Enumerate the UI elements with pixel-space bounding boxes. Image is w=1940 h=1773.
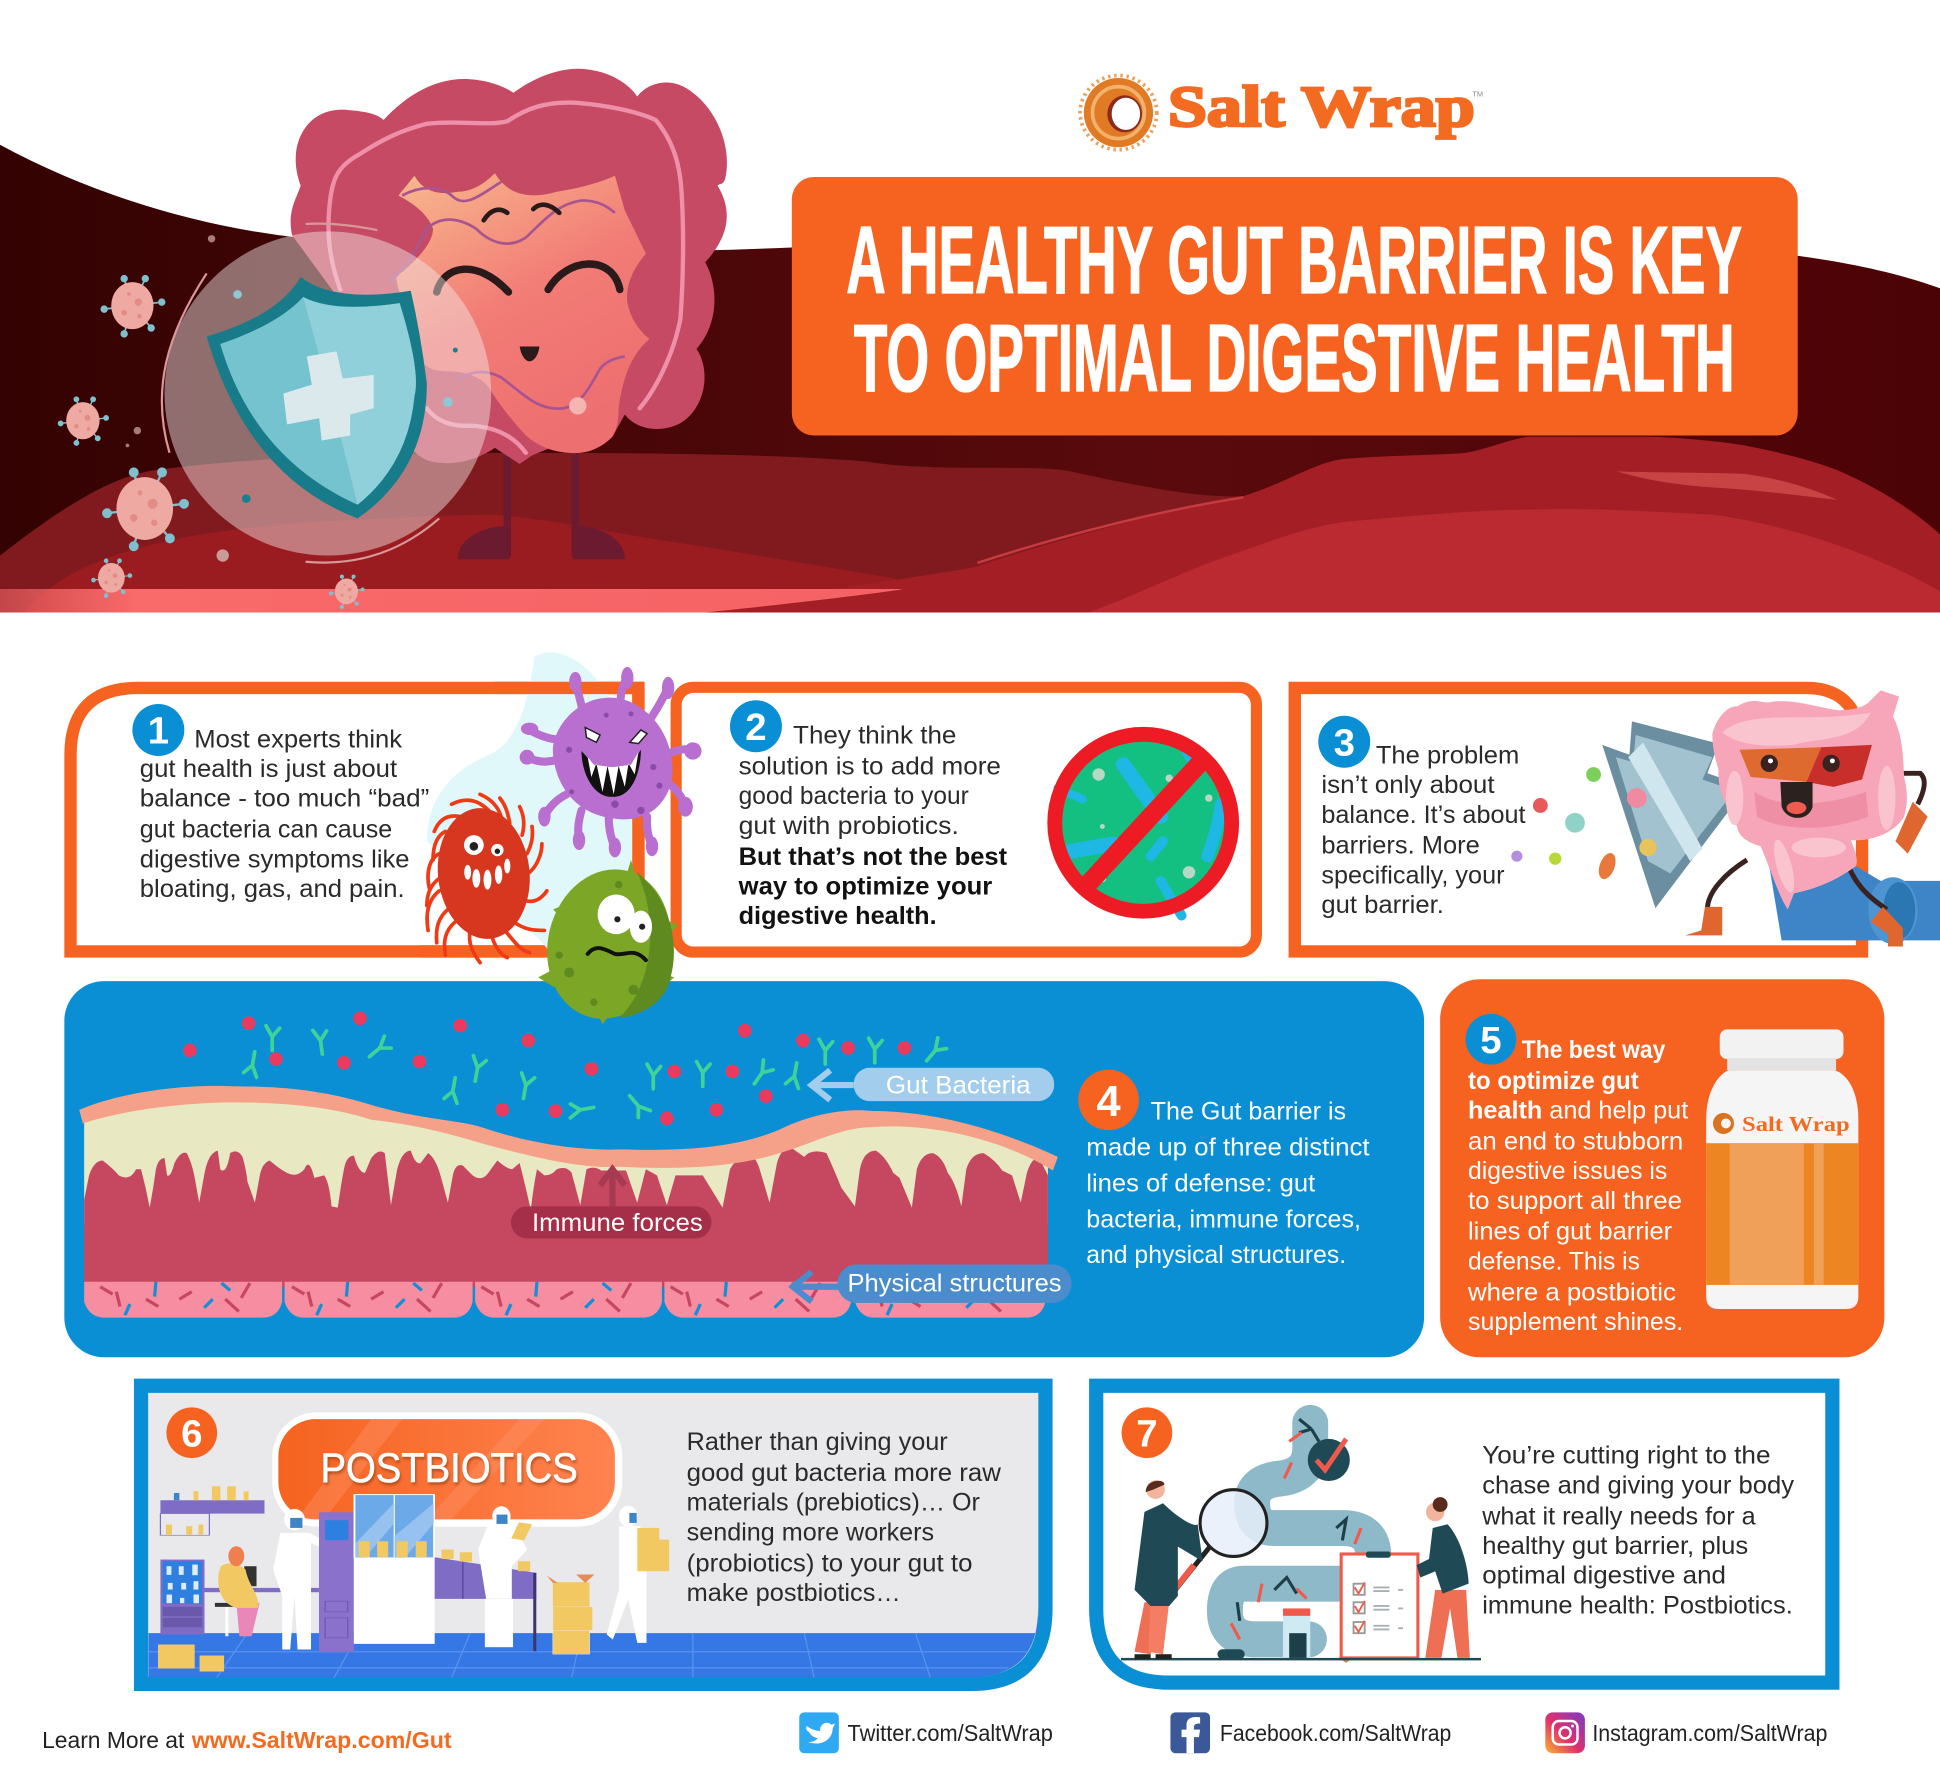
number 6 — [166, 1407, 217, 1458]
text 3: The problem — [1376, 741, 1519, 769]
text 3: isn’t only about — [1321, 771, 1495, 799]
bacteria dots — [183, 1011, 911, 1125]
gut tissue layers — [79, 1086, 1058, 1318]
POSTBIOTICS sign: POSTBIOTICS — [320, 1444, 578, 1491]
mask — [1740, 747, 1821, 782]
orange top edge over blob — [495, 683, 643, 693]
text 4: made up of three distinct — [1086, 1134, 1370, 1162]
text 5: lines of gut barrier — [1468, 1218, 1673, 1246]
twitter — [799, 1712, 1053, 1753]
number 4 — [1078, 1070, 1139, 1130]
intestine hero — [1685, 690, 1928, 947]
face — [396, 173, 650, 453]
text 2 — [738, 722, 1008, 930]
conveyor — [435, 1550, 536, 1651]
gut tube illustration — [1121, 1419, 1481, 1663]
instagram: Instagram.com/SaltWrap — [1592, 1720, 1827, 1746]
man with magnifier — [1135, 1480, 1203, 1659]
text 6: Rather than giving your — [687, 1428, 948, 1456]
text 4 — [1086, 1098, 1370, 1269]
motion arcs — [162, 224, 439, 563]
bottle label logo: Salt Wrap — [1742, 1112, 1850, 1136]
text 5: supplement shines. — [1468, 1308, 1683, 1336]
legs and feet — [458, 445, 625, 559]
panel 4: gut barrier diagram — [64, 981, 1424, 1357]
text 7: immune health: Postbiotics. — [1482, 1591, 1793, 1619]
shield cross — [283, 351, 374, 440]
arrow and label: gut bacteria: Gut Bacteria — [886, 1072, 1032, 1100]
number 1 — [132, 704, 184, 756]
text 7: chase and giving your body — [1482, 1471, 1794, 1499]
text 5: to optimize gut — [1468, 1067, 1639, 1095]
hero banner background — [0, 145, 1940, 612]
woman with clipboard — [1417, 1497, 1470, 1658]
panel 2: probiotics — [676, 687, 1256, 952]
shelves — [160, 1486, 264, 1535]
checklist clipboard — [1341, 1552, 1418, 1658]
text 5: an end to stubborn — [1468, 1127, 1683, 1155]
lab floor — [148, 1608, 1038, 1677]
purple bacterium — [520, 667, 702, 857]
text 5: to support all three — [1468, 1187, 1682, 1215]
bacteria characters and cyan blob — [421, 652, 702, 1032]
POSTBIOTICS sign — [272, 1412, 622, 1527]
number 3: 3 — [1334, 721, 1355, 764]
logo: Salt Wrap: Salt Wrap — [1168, 74, 1475, 139]
text 4: and physical structures. — [1086, 1241, 1346, 1269]
text 5: health and help put — [1468, 1096, 1688, 1124]
antibodies — [243, 1026, 948, 1119]
text 5: where a postbiotic — [1467, 1278, 1676, 1306]
text 4: lines of defense: gut — [1086, 1169, 1315, 1197]
shield of character — [1602, 721, 1747, 908]
number 1: 1 — [148, 710, 169, 753]
text 1: digestive symptoms like — [140, 845, 410, 873]
text 1: balance - too much “bad” — [140, 785, 429, 813]
panel 7: cutting to the chase — [1096, 1386, 1832, 1683]
cyan blob — [427, 652, 633, 953]
text 7: optimal digestive and — [1482, 1562, 1726, 1590]
text 3: specifically, your — [1321, 861, 1505, 889]
check badge — [1308, 1439, 1350, 1481]
text 2: way to optimize your — [738, 873, 992, 901]
panel 1 orange edge over blob — [421, 688, 638, 951]
seated scientist — [203, 1546, 325, 1636]
number 6: 6 — [181, 1412, 202, 1455]
text 2: They think the — [793, 722, 956, 750]
intestine outer body — [291, 69, 727, 464]
text 6: (probiotics) to your gut to — [687, 1549, 972, 1577]
intestine character with shield — [126, 69, 727, 563]
text 2: gut with probiotics. — [739, 812, 959, 840]
small particles — [126, 235, 458, 562]
number 5 — [1466, 1014, 1516, 1065]
blue cabinet — [160, 1560, 204, 1635]
learn more link: Learn More at — [42, 1727, 185, 1753]
learn more link: www.SaltWrap.com/Gut — [191, 1727, 452, 1753]
floor boxes — [158, 1645, 224, 1672]
arrow and label: immune forces — [511, 1169, 711, 1238]
twitter: Twitter.com/SaltWrap — [848, 1720, 1053, 1746]
stacked boxes — [547, 1575, 594, 1654]
purple wavy lines — [390, 182, 625, 409]
text 5: defense. This is — [1468, 1247, 1640, 1275]
text 6: materials (prebiotics)… Or — [687, 1489, 980, 1517]
instagram — [1545, 1712, 1827, 1753]
green bacterium — [532, 856, 686, 1032]
text 6 — [687, 1428, 1002, 1607]
text 5 — [1467, 1036, 1688, 1336]
text 3: balance. It’s about — [1321, 801, 1526, 829]
panel 1: balance — [71, 688, 638, 951]
text 5: The best way — [1522, 1036, 1665, 1064]
text 6: make postbiotics… — [687, 1579, 901, 1607]
title box — [792, 177, 1798, 436]
text 1: gut health is just about — [140, 755, 397, 783]
text 2: digestive health. — [739, 902, 937, 930]
logo: Salt Wrap: TM — [1472, 90, 1483, 99]
supplement bottle — [1706, 1029, 1858, 1309]
number 2 — [730, 700, 782, 752]
lab illustration — [158, 1486, 669, 1672]
face: eyes and mouth — [437, 205, 620, 292]
bottle label logo — [1713, 1112, 1850, 1136]
capsules — [1217, 1643, 1375, 1663]
pale intestine lines — [328, 103, 683, 453]
viruses — [58, 276, 364, 608]
learn more link — [42, 1727, 452, 1753]
worker 2 — [478, 1506, 532, 1647]
worker 3 with box — [607, 1506, 669, 1643]
text 1: bloating, gas, and pain. — [140, 875, 405, 903]
number 3 — [1318, 716, 1370, 768]
facebook: Facebook.com/SaltWrap — [1220, 1720, 1451, 1746]
text 2: good bacteria to your — [739, 782, 969, 810]
facebook — [1170, 1712, 1451, 1753]
number 7: 7 — [1136, 1412, 1158, 1455]
text 2: But that’s not the best — [739, 843, 1008, 871]
panel 5: postbiotic supplement — [1440, 979, 1884, 1357]
arrow and label: physical structures — [793, 1264, 1071, 1303]
arrow and label: gut bacteria — [812, 1068, 1054, 1101]
number 7 — [1122, 1407, 1172, 1458]
logo: Salt Wrap — [1080, 74, 1483, 150]
text 7: what it really needs for a — [1481, 1502, 1757, 1530]
number 4: 4 — [1097, 1078, 1121, 1126]
floor grid — [148, 1633, 1029, 1678]
text 2: solution is to add more — [739, 753, 1001, 781]
panel 3: barriers — [1295, 688, 1940, 951]
ground line — [1121, 1658, 1481, 1660]
blue roll — [1769, 866, 1940, 944]
text 7: healthy gut barrier, plus — [1482, 1532, 1748, 1560]
text 1: Most experts think — [194, 725, 402, 753]
arrow and label: immune forces: Immune forces — [532, 1209, 703, 1237]
shield — [207, 277, 427, 518]
text 5: digestive issues is — [1468, 1157, 1667, 1185]
glass cabinet and counter — [354, 1495, 435, 1644]
footer — [42, 1712, 1827, 1753]
number 5: 5 — [1480, 1019, 1502, 1062]
text 1 — [140, 725, 429, 903]
text 3 — [1321, 741, 1526, 919]
protective bubble — [165, 231, 491, 556]
red bacterium — [427, 794, 547, 963]
control machine — [319, 1512, 354, 1652]
jar — [1283, 1608, 1310, 1659]
worker 1 — [273, 1509, 331, 1650]
panel 6: postbiotics lab — [141, 1386, 1045, 1684]
text 7: You’re cutting right to the — [1482, 1442, 1770, 1470]
text 3: barriers. More — [1321, 832, 1480, 860]
arrow and label: physical structures: Physical structures — [848, 1270, 1062, 1298]
text 6: good gut bacteria more raw — [687, 1459, 1002, 1487]
number 2: 2 — [745, 706, 767, 749]
text 3: gut barrier. — [1321, 891, 1444, 919]
text 4: bacteria, immune forces, — [1086, 1205, 1361, 1233]
text 4: The Gut barrier is — [1151, 1098, 1346, 1126]
text 7 — [1481, 1442, 1794, 1619]
text 6: sending more workers — [687, 1518, 934, 1546]
text 1: gut bacteria can cause — [140, 816, 392, 844]
small germs — [1511, 767, 1619, 881]
magnifier — [1169, 1490, 1267, 1596]
icon: no bacteria sign — [1055, 734, 1232, 916]
